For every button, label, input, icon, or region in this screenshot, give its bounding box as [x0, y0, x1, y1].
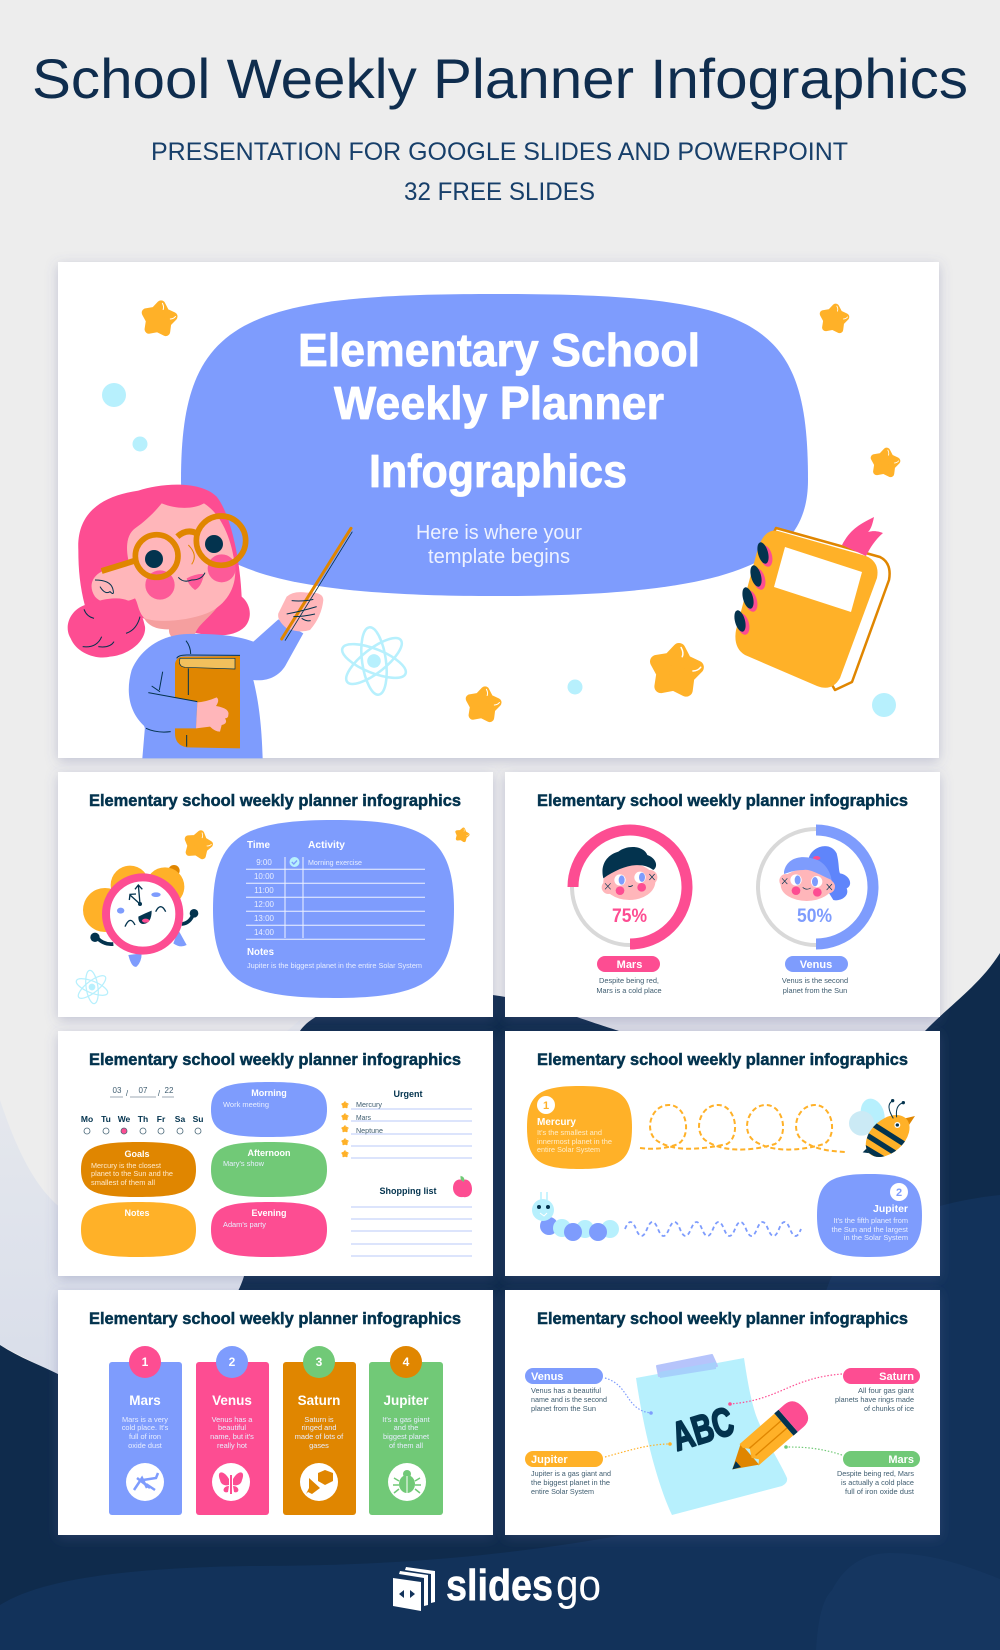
icon: atom small [70, 964, 114, 1010]
panel: tracing slide [505, 1031, 940, 1276]
connectors [605, 1374, 842, 1457]
illustration: teacher girl [68, 485, 352, 758]
background: dark navy wave [0, 953, 1000, 1650]
slide heading: Elementary school weekly planner infographics [89, 791, 461, 810]
column: Venus: really hot [217, 1441, 247, 1450]
percentage values: 50% [797, 906, 832, 927]
background: lighter navy wave [0, 1195, 1000, 1650]
column: Jupiter: and the [394, 1423, 418, 1432]
column: Saturn: made of lots of [295, 1432, 344, 1441]
schedule text [247, 858, 422, 970]
callout: Jupiter: entire Solar System [531, 1487, 594, 1496]
column: Saturn [283, 1346, 356, 1515]
column: Jupiter [369, 1346, 443, 1515]
urgent list: Mars [356, 1113, 371, 1122]
callout: Jupiter: the biggest planet in the [531, 1478, 610, 1487]
block: Goals: smallest of them all [91, 1178, 155, 1187]
column: Venus: Venus has a [212, 1415, 253, 1424]
icon: grasshopper [134, 1473, 158, 1490]
cover subtitle [416, 522, 582, 568]
block: Evening [211, 1202, 327, 1257]
column: Mars: Mars [129, 1393, 161, 1408]
column: Venus [196, 1346, 269, 1515]
illustration: girl face [779, 846, 850, 901]
callout: Saturn: planets have rings made [835, 1395, 914, 1404]
subtitle: 32 FREE SLIDES [404, 178, 595, 206]
illustration: note paper [636, 1355, 787, 1515]
block: Jupiter [817, 1174, 922, 1257]
block: Goals: Goals [124, 1149, 150, 1159]
block: Notes [81, 1202, 196, 1257]
cover heading: Elementary School [298, 324, 700, 376]
panel: four columns slide [58, 1290, 493, 1535]
slide heading: Elementary school weekly planner infographics [537, 1050, 908, 1069]
panel: daily planner slide [58, 1031, 493, 1276]
block: Morning [211, 1082, 327, 1137]
callout: Venus: Venus [531, 1371, 563, 1383]
pill: Mars: Mars [617, 959, 642, 971]
schedule headers: Notes [247, 946, 274, 958]
week days: Su [193, 1114, 203, 1124]
illustration: caterpillar [532, 1192, 619, 1241]
dashed loop path [640, 1105, 845, 1152]
percentage values: 75% [612, 906, 647, 927]
week days: We [118, 1114, 131, 1124]
callout: Saturn [835, 1368, 920, 1413]
schedule times: 14:00 [254, 928, 275, 937]
icon: apple [453, 1176, 472, 1197]
urgent list [342, 1089, 472, 1158]
block: Mercury [527, 1086, 632, 1169]
block: Afternoon [211, 1142, 327, 1197]
column: Venus: Venus [212, 1393, 252, 1408]
stars [185, 827, 470, 857]
block: Jupiter: Jupiter [873, 1203, 908, 1215]
schedule text: Morning exercise [308, 858, 362, 867]
illustration: pencil [723, 1397, 813, 1480]
pill: Venus: Venus [800, 959, 832, 971]
callout: Jupiter: Jupiter is a gas giant and [531, 1469, 611, 1478]
block: Mercury: 1 [543, 1100, 549, 1112]
date: 07 [139, 1086, 148, 1095]
descriptions [596, 976, 848, 995]
callout: Mars: is actually a cold place [841, 1478, 914, 1487]
shopping list [351, 1186, 472, 1256]
block: Morning: Work meeting [223, 1100, 269, 1109]
icon: atom [329, 615, 419, 707]
schedule headers: Activity [308, 839, 345, 851]
schedule times: 10:00 [254, 872, 275, 881]
descriptions: Venus is the second [782, 976, 848, 985]
dashed wave path [625, 1222, 801, 1236]
week days: Tu [101, 1114, 111, 1124]
shopping list: Shopping list [380, 1186, 436, 1196]
callout: Mars: full of iron oxide dust [845, 1487, 914, 1496]
column: Jupiter: of them all [389, 1441, 423, 1450]
pill: Mars [597, 956, 660, 972]
schedule times [254, 858, 275, 937]
block: Jupiter: the Sun and the largest [832, 1225, 908, 1234]
icon: honey bee [306, 1470, 333, 1494]
column: Venus: name, but it's [210, 1432, 254, 1441]
callout: Venus: planet from the Sun [531, 1404, 596, 1413]
block: Mercury: innermost planet in the [537, 1137, 612, 1146]
schedule headers [247, 839, 345, 958]
decorative dots [102, 383, 896, 717]
background: bottom right blob [816, 1553, 1000, 1650]
slide heading: Elementary school weekly planner infographics [89, 1309, 461, 1328]
column: Saturn: Saturn is [304, 1415, 334, 1424]
icon: beetle [393, 1470, 421, 1493]
callout: Venus: Venus has a beautiful [531, 1386, 601, 1395]
block: Goals: planet to the Sun and the [91, 1169, 173, 1178]
column: Saturn: Saturn [298, 1393, 340, 1408]
block: Jupiter: It's the fifth planet from [833, 1216, 908, 1225]
callout: Jupiter [525, 1451, 611, 1496]
date: / [158, 1089, 161, 1098]
schedule headers: Time [247, 839, 270, 851]
icon: check [290, 857, 300, 867]
cover subtitle: template begins [428, 546, 570, 568]
slide heading: Elementary school weekly planner infographics [537, 791, 908, 810]
callout: Saturn: All four gas giant [858, 1386, 914, 1395]
schedule times: 9:00 [256, 858, 272, 867]
callout: Venus: name and is the second [531, 1395, 607, 1404]
date: / [126, 1089, 129, 1098]
callout: Venus [525, 1368, 607, 1413]
logo icon [393, 1567, 435, 1611]
descriptions: Despite being red, [599, 976, 659, 985]
panel: cover slide [58, 262, 939, 758]
callout: Saturn: of chunks of ice [864, 1404, 914, 1413]
schedule times: 11:00 [254, 886, 274, 895]
column: Mars: full of iron [129, 1432, 161, 1441]
block: Jupiter: in the Solar System [844, 1233, 908, 1242]
background: pale shape right [500, 1000, 940, 1250]
chart: Mars 75% ring [572, 829, 688, 945]
slide heading: Elementary school weekly planner infographics [537, 1309, 908, 1328]
icon: butterfly [219, 1472, 243, 1494]
subtitle: PRESENTATION FOR GOOGLE SLIDES AND POWERPOINT [151, 138, 848, 166]
urgent list: Mercury [356, 1100, 382, 1109]
date [110, 1086, 174, 1098]
week days: Fr [157, 1114, 166, 1124]
week days: Mo [81, 1114, 93, 1124]
block: Afternoon: Afternoon [248, 1148, 290, 1158]
ABC lettering: ABC [667, 1399, 739, 1460]
cover heading: Infographics [369, 445, 627, 497]
column: Mars: cold place. It's [122, 1423, 169, 1432]
block: Goals [81, 1142, 196, 1197]
descriptions: planet from the Sun [783, 986, 847, 995]
cover subtitle: Here is where your [416, 522, 582, 544]
column: Jupiter: Jupiter [383, 1393, 429, 1408]
panel: schedule slide [58, 772, 493, 1017]
column: Saturn: ringed and [302, 1423, 336, 1432]
callout: Mars: Mars [888, 1454, 914, 1466]
cover heading [298, 324, 700, 497]
illustration: bee [849, 1098, 915, 1157]
block: Notes: Notes [124, 1208, 150, 1218]
column: Mars: 1 [142, 1355, 149, 1369]
subtitle [151, 138, 848, 206]
callout: Saturn: Saturn [879, 1371, 914, 1383]
column: Jupiter: 4 [403, 1355, 410, 1369]
slide heading: Elementary school weekly planner infographics [89, 1050, 461, 1069]
column: Jupiter: It's a gas giant [382, 1415, 430, 1424]
logo wordmark light part: go [556, 1561, 601, 1610]
block: Mercury: It's the smallest and [537, 1128, 602, 1137]
week days: Sa [175, 1114, 185, 1124]
schedule text: Jupiter is the biggest planet in the entire Solar System [247, 961, 422, 970]
callout: Jupiter: Jupiter [531, 1454, 568, 1466]
column: Saturn: gases [309, 1441, 329, 1450]
block: Afternoon: Mary's show [223, 1159, 265, 1168]
logo wordmark: slides [446, 1561, 553, 1610]
pill: Venus [785, 956, 848, 972]
cover blob [181, 294, 808, 596]
descriptions: Mars is a cold place [596, 986, 662, 995]
schedule times: 12:00 [254, 900, 275, 909]
callout: Mars: Despite being red, Mars [837, 1469, 914, 1478]
illustration: notebook [732, 517, 890, 690]
column: Venus: 2 [229, 1355, 236, 1369]
urgent list: Neptune [356, 1126, 383, 1135]
block: Evening: Adam's party [223, 1220, 266, 1229]
decorative stars [144, 301, 900, 719]
cover heading: Weekly Planner [334, 377, 664, 429]
illustration: alarm clock [83, 865, 198, 967]
urgent list: Urgent [394, 1089, 423, 1099]
block: Evening: Evening [251, 1208, 287, 1218]
column: Saturn: 3 [316, 1355, 323, 1369]
schedule grid [246, 857, 425, 939]
week days [81, 1114, 203, 1124]
background: pale blue-grey shape [0, 1020, 330, 1375]
day selectors [84, 1128, 201, 1134]
block: Mercury: entire Solar System [537, 1145, 600, 1154]
percentage values [612, 906, 832, 927]
date: 22 [165, 1086, 174, 1095]
block: Morning: Morning [251, 1088, 287, 1098]
panel: progress rings slide [505, 772, 940, 1017]
week days: Th [138, 1114, 148, 1124]
column: Mars: oxide dust [128, 1441, 162, 1450]
illustration: boy face [602, 847, 657, 900]
callout: Mars [837, 1451, 920, 1496]
block: Jupiter: 2 [896, 1187, 902, 1199]
block: Goals: Mercury is the closest [91, 1161, 161, 1170]
panel: ABC note slide [505, 1290, 940, 1535]
column: Mars: Mars is a very [122, 1415, 168, 1424]
logo: slidesgo [393, 1561, 601, 1611]
connector endpoints [649, 1402, 788, 1449]
main title: School Weekly Planner Infographics [32, 47, 968, 110]
chart: Venus 50% ring [758, 829, 874, 945]
column: Jupiter: biggest planet [383, 1432, 429, 1441]
date: 03 [113, 1086, 122, 1095]
block: Mercury: Mercury [537, 1116, 576, 1128]
schedule blob [213, 820, 454, 998]
column: Venus: beautiful [218, 1423, 246, 1432]
schedule times: 13:00 [254, 914, 275, 923]
column: Mars [109, 1346, 182, 1515]
